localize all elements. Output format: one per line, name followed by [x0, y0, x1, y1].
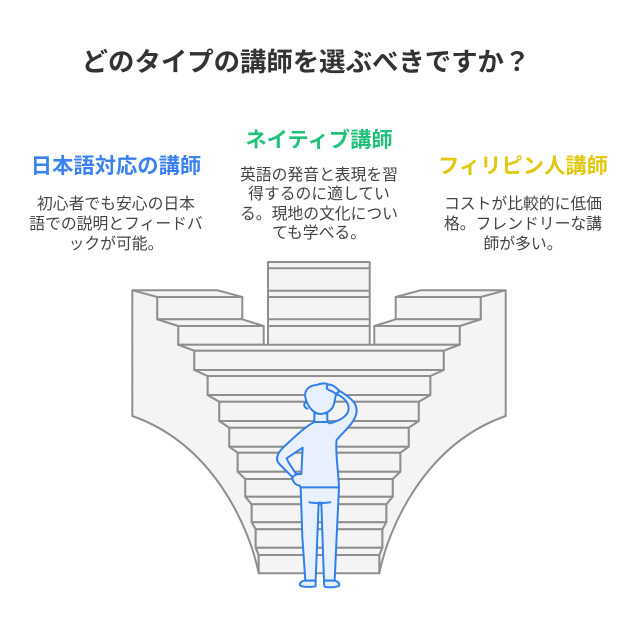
description: Filipino teachers: 師が多い。 [484, 235, 562, 253]
heading: Filipino teachers: フィリピン人講師 [438, 154, 608, 178]
person scratching head [277, 383, 357, 587]
hand on head [327, 385, 339, 394]
title: どのタイプの講師を選ぶべきですか？ [82, 47, 530, 77]
centre tower [268, 262, 370, 345]
description: native teachers: ても学べる。 [272, 224, 366, 242]
description: native teachers: る。現地の文化につい [240, 205, 398, 223]
waistband and back-pocket detail [293, 474, 338, 503]
upper left steps [132, 290, 264, 345]
left ear [304, 403, 307, 409]
staircase funnel [132, 262, 506, 573]
left wall [132, 290, 259, 573]
description: native teachers [240, 166, 398, 242]
body and legs [277, 391, 357, 581]
description: native teachers: 英語の発音と表現を習 [240, 166, 398, 184]
right wall [379, 290, 506, 573]
description: Japanese-speaking teachers [29, 195, 203, 253]
upper right steps [374, 290, 506, 345]
right shoe [324, 581, 339, 587]
description: Filipino teachers [444, 195, 602, 253]
heading: Japanese-speaking teachers: 日本語対応の講師 [31, 154, 201, 178]
description: Filipino teachers: コストが比較的に低価 [444, 195, 602, 213]
heading: native teachers: ネイティブ講師 [245, 127, 393, 152]
central stair treads [178, 345, 460, 573]
left shoe [300, 581, 316, 587]
description: Japanese-speaking teachers: 語での説明とフィードバ [29, 215, 203, 233]
column: Filipino teachers [438, 154, 608, 253]
description: Japanese-speaking teachers: 初心者でも安心の日本 [37, 195, 195, 213]
neck collar [314, 413, 327, 422]
description: Japanese-speaking teachers: ックが可能。 [69, 235, 163, 253]
description: native teachers: 得するのに適してい [248, 185, 390, 203]
head [305, 383, 336, 414]
column: Japanese-speaking teachers [29, 154, 203, 253]
description: Filipino teachers: 格。フレンドリーな講 [444, 215, 602, 233]
column: native teachers [240, 127, 398, 242]
